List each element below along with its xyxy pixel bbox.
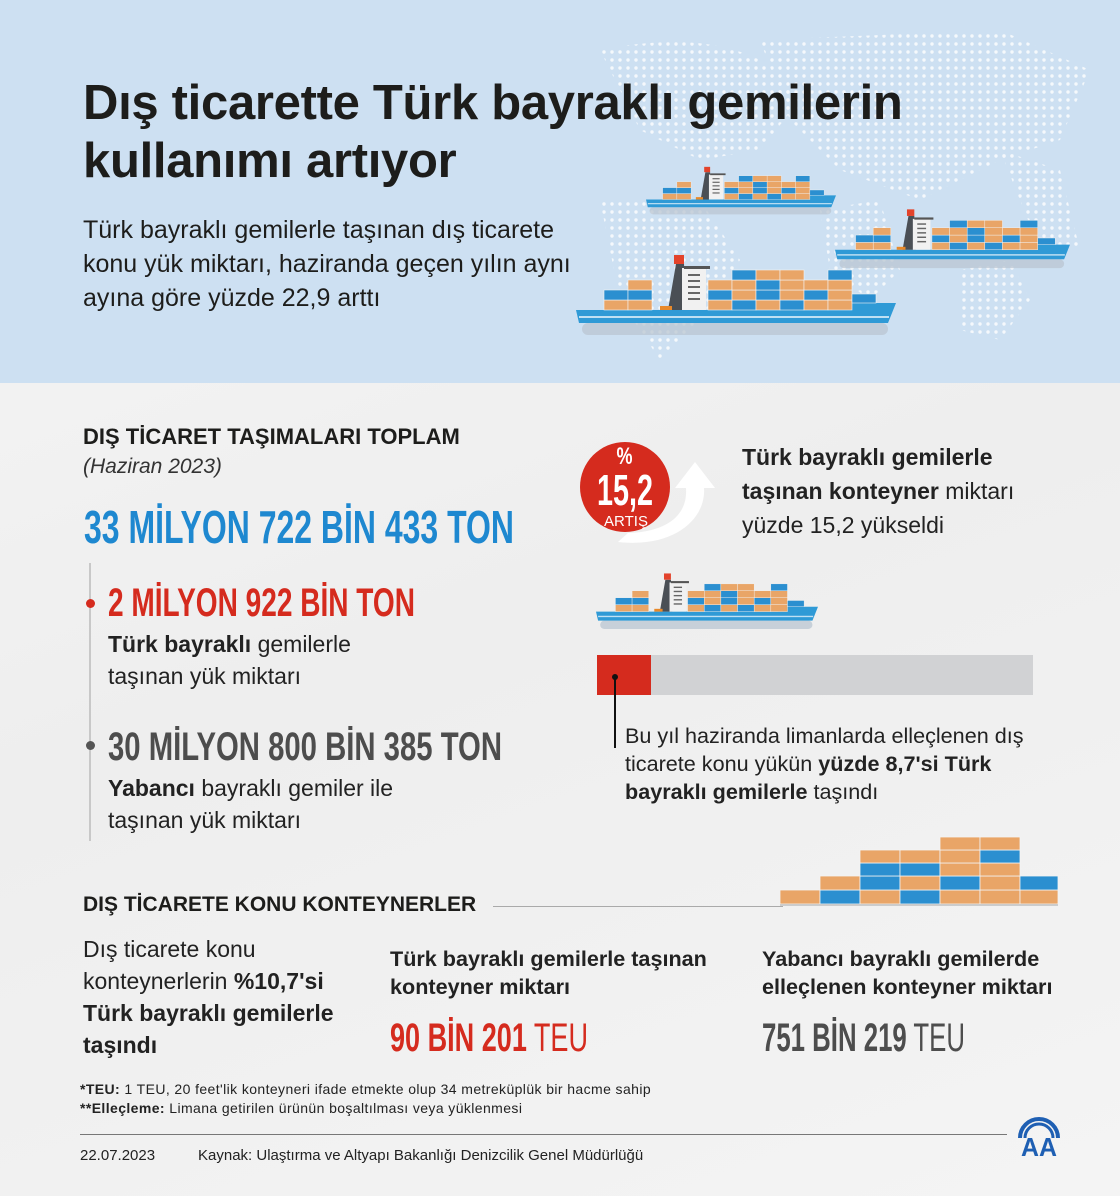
- badge: 15.2% increase: [580, 442, 715, 543]
- container share text: taşındı: [83, 1032, 157, 1058]
- subtitle: konu yük miktarı, haziranda geçen yılın aynı: [83, 250, 571, 278]
- foreign flag containers: elleçlenen konteyner miktarı: [762, 974, 1052, 999]
- badge: 15.2% increase: ARTIŞ: [604, 513, 648, 530]
- world map dots: [602, 34, 1086, 358]
- container increase text: Türk bayraklı gemilerle: [742, 444, 993, 470]
- subtitle: Türk bayraklı gemilerle taşınan dış ticarete: [83, 216, 554, 244]
- header background: [0, 0, 1120, 383]
- text: (Haziran 2023): [83, 455, 222, 478]
- container share text: konteynerlerin %10,7'si: [83, 968, 324, 994]
- container share text: [83, 936, 334, 1058]
- turkish flag containers: konteyner miktarı: [390, 974, 570, 999]
- container increase text: yüzde 15,2 yükseldi: [742, 512, 944, 538]
- container share text: Dış ticarete konu: [83, 936, 256, 962]
- subtitle: ayına göre yüzde 22,9 arttı: [83, 284, 380, 312]
- item: foreign flag cargo: Yabancı bayraklı gemiler ile: [108, 775, 393, 801]
- foreign flag containers: [762, 946, 1052, 1057]
- item: turkish flag cargo: [86, 581, 415, 689]
- ships illustration: [576, 166, 1070, 335]
- foreign flag containers: Yabancı bayraklı gemilerde: [762, 946, 1039, 971]
- item: foreign flag cargo: [86, 725, 502, 833]
- logo: AA: [1018, 1117, 1060, 1158]
- badge: 15.2% increase: %: [616, 444, 633, 470]
- container share text: Türk bayraklı gemilerle: [83, 1000, 334, 1026]
- footer: 22.07.2023: [80, 1147, 155, 1164]
- container increase text: taşınan konteyner miktarı: [742, 478, 1014, 504]
- title: Dış ticarette Türk bayraklı gemilerin: [83, 76, 903, 130]
- share text: Bu yıl haziranda limanlarda elleçlenen dış: [625, 723, 1024, 748]
- section heading: containers: DIŞ TİCARETE KONU KONTEYNERLER: [83, 893, 476, 916]
- subtitle: [83, 216, 571, 312]
- turkish flag containers: [390, 946, 707, 1057]
- title: kullanımı artıyor: [83, 134, 456, 188]
- item: turkish flag cargo: taşınan yük miktarı: [108, 663, 301, 689]
- vertical divider: [89, 563, 91, 841]
- footnotes: *TEU: 1 TEU, 20 feet'lik konteyneri ifade etmekte olup 34 metreküplük bir hacme sahip: [80, 1081, 651, 1097]
- badge: 15.2% increase: 15,2: [597, 466, 653, 515]
- ship icon: [596, 573, 818, 629]
- container stack icon: [780, 837, 1058, 906]
- text: Kaynak: Ulaştırma ve Altyapı Bakanlığı Denizcilik Genel Müdürlüğü: [198, 1147, 643, 1164]
- share bar chart: [597, 655, 1033, 695]
- share text: [625, 723, 1024, 804]
- footnotes: [80, 1081, 651, 1116]
- item: foreign flag cargo: taşınan yük miktarı: [108, 807, 301, 833]
- item: turkish flag cargo: Türk bayraklı gemilerle: [108, 631, 351, 657]
- share text: bayraklı gemilerle taşındı: [625, 779, 878, 804]
- footnotes: **Elleçleme: Limana getirilen ürünün boşaltılması veya yüklenmesi: [80, 1100, 522, 1116]
- share text: ticarete konu yükün yüzde 8,7'si Türk: [625, 751, 991, 776]
- title: [83, 76, 903, 188]
- container increase text: [742, 444, 1014, 538]
- turkish flag containers: Türk bayraklı gemilerle taşınan: [390, 946, 707, 971]
- callout line: [614, 678, 616, 748]
- section heading: totals: DIŞ TİCARET TAŞIMALARI TOPLAM: [83, 424, 460, 449]
